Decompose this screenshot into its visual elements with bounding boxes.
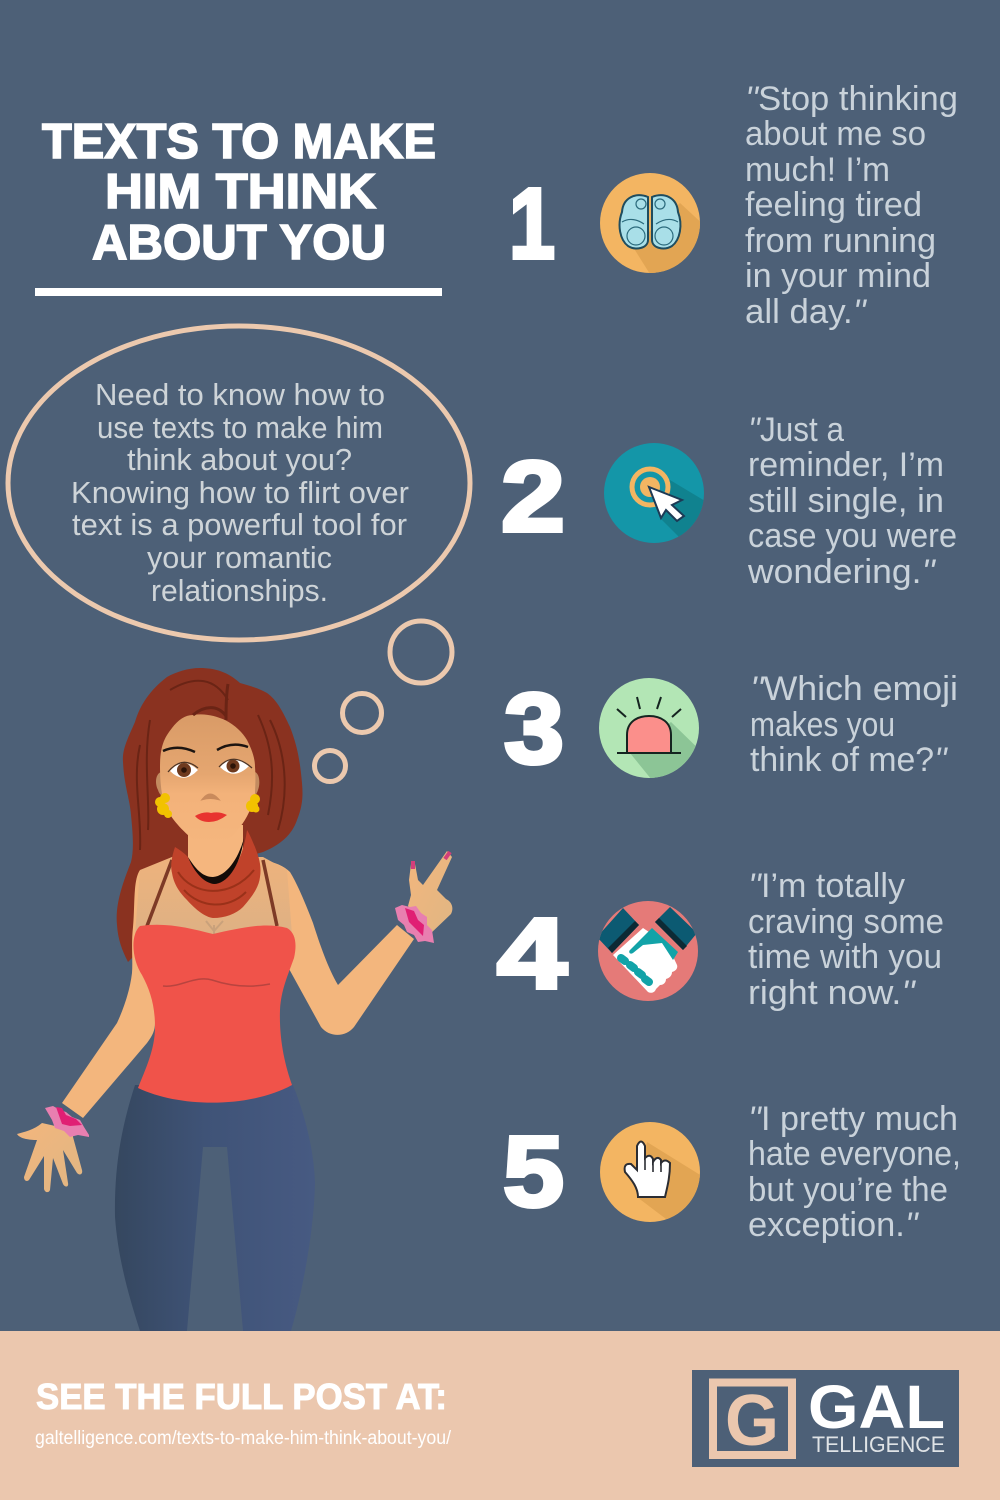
hair strands [137,681,285,850]
number 3: 3 [504,673,564,785]
left arm [62,870,168,1118]
left scrunchie [45,1106,89,1137]
icon: pointing hand [600,1122,700,1222]
quote 3: think of me?'' [750,741,948,779]
hair part [193,684,228,720]
logo [692,1370,959,1467]
straps [147,860,277,926]
earrings [155,793,260,818]
bubble text: relationships. [151,573,328,608]
quote 4: right now.'' [748,974,917,1012]
thought circles [314,621,452,782]
right arm [262,860,414,1035]
quote 5: but you’re the [748,1171,948,1209]
number 5: 5 [503,1116,564,1228]
footer url: galtelligence.com/texts-to-make-him-think-about-you/ [35,1428,452,1449]
quote 2: ''Just a [748,411,844,449]
quote 2: wondering.'' [747,553,937,591]
bubble text: think about you? [127,442,352,477]
footer heading: SEE THE FULL POST AT: [36,1376,447,1417]
torso skin [135,857,292,935]
quote 4: ''I’m totally [748,867,905,905]
quote 3 [750,670,958,779]
woman illustration [17,668,452,1331]
necklace [206,921,223,942]
quote 5 [748,1100,961,1244]
quote 2: reminder, I’m [748,446,944,484]
quote 2: case you were [748,517,957,555]
face [160,714,255,847]
icon: handshake [597,901,698,1001]
logo: GAL [808,1373,945,1441]
number 4: 4 [497,898,567,1010]
quote 5: hate everyone, [748,1135,961,1173]
bubble text: use texts to make him [97,410,383,445]
title: TEXTS TO MAKE [42,115,436,169]
nails [413,852,450,869]
logo: TELLIGENCE [812,1432,945,1457]
icon: brain [600,173,700,273]
icon: siren [599,678,699,778]
title: HIM THINK [105,165,376,219]
neck [188,825,243,884]
quote 1: feeling tired [745,186,922,224]
bubble text: text is a powerful tool for [72,507,407,542]
top crease [163,979,270,986]
footer band [0,1331,1000,1500]
bubble text: Need to know how to [95,377,385,412]
quote 2 [747,411,957,591]
title: ABOUT YOU [92,216,386,270]
quote 1: in your mind [745,257,931,295]
jeans [115,1085,315,1331]
title [42,115,436,270]
quote 1: all day.'' [745,293,868,331]
quote 2: still single, in [748,482,944,520]
hair back [117,668,302,962]
number 2: 2 [501,441,565,553]
lower hand [17,1123,82,1192]
thought bubble [8,326,470,640]
scarf folds [178,870,254,905]
quote 1 [745,80,958,331]
number 1: 1 [509,168,555,280]
logo: G [725,1381,779,1461]
bubble text: your romantic [147,540,332,575]
icon: target cursor [604,443,704,543]
bubble text [71,377,409,608]
quote 3: ''Which emoji [750,670,958,708]
quote 1: much! I’m [745,151,890,189]
quote 4: time with you [748,938,942,976]
scarf collar [188,838,244,884]
top [133,925,296,1103]
quote 5: ''I pretty much [748,1100,958,1138]
nose [203,794,218,799]
quote 4: craving some [748,903,944,941]
lips [195,812,227,822]
quote 1: from running [745,222,936,260]
raised hand [408,851,452,935]
scarf [171,830,261,918]
quote 5: exception.'' [748,1206,920,1244]
eyes [163,745,252,778]
ear left [156,772,167,796]
title underline [35,288,442,296]
ear right [250,772,259,796]
quote 1: ''Stop thinking [745,80,958,118]
bubble text: Knowing how to flirt over [71,475,409,510]
quote 3: makes you [750,706,895,744]
quote 4 [748,867,944,1012]
right scrunchie [395,905,434,943]
quote 1: about me so [745,115,926,153]
